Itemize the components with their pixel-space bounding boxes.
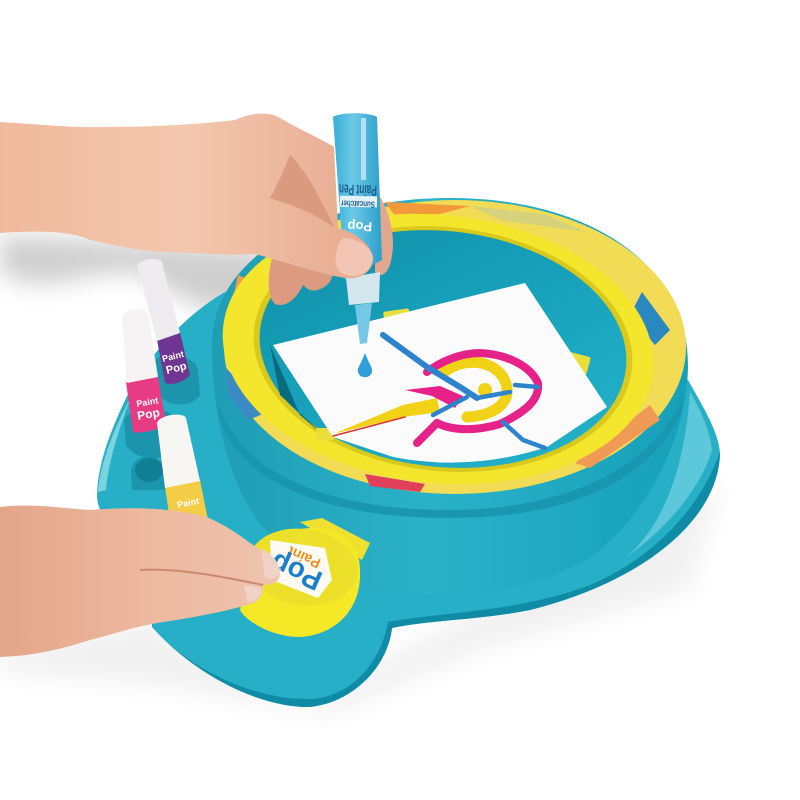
empty holder cup: [131, 456, 166, 490]
white paper card: [273, 283, 607, 463]
toy base plate: [97, 292, 720, 707]
upper hand: [0, 114, 373, 278]
bottle: pink: Paint: [136, 395, 159, 409]
fingernail: middle: [262, 549, 280, 579]
dark gap under paper: [270, 345, 335, 445]
holder cup: purple: [155, 355, 200, 404]
holder cup: pink: [124, 409, 177, 458]
spin button: Pop: [266, 547, 327, 597]
finger gap: [140, 570, 263, 585]
bottle: yellow: [157, 415, 208, 520]
paint pen bottle: [333, 113, 382, 344]
paint pen bottle: Paint Pen: [339, 180, 377, 199]
shadow under upper hand: [0, 235, 270, 312]
bottle: yellow: Paint: [176, 496, 200, 510]
bowl interior: [248, 212, 638, 486]
paint pen bottle: Suncatcher: [340, 198, 375, 210]
thumbnail: [336, 238, 373, 276]
lower hand: [0, 505, 280, 657]
yellow paper clips: [316, 308, 591, 440]
yellow ring: [209, 193, 667, 505]
spin button: Paint: [285, 543, 323, 572]
fingernail: ring: [244, 586, 262, 602]
finger fold: [270, 155, 335, 228]
bottle: purple: Paint: [161, 349, 185, 364]
fingers behind pen: [269, 190, 393, 305]
paint drop: [358, 353, 372, 377]
bottle: pink: Pop: [136, 405, 161, 423]
decorated rim: [224, 200, 686, 494]
small paint bottles: [122, 259, 208, 520]
bottle: pink: [122, 309, 166, 433]
bottle: purple: [137, 259, 190, 384]
paint swirl artwork: [333, 335, 545, 448]
soft shadow under toy: [0, 480, 720, 715]
paint pen bottle: Pop: [347, 219, 372, 234]
toy bowl outer wall: [212, 198, 688, 595]
spin button: [240, 518, 370, 637]
bottle: purple: Pop: [165, 360, 188, 377]
